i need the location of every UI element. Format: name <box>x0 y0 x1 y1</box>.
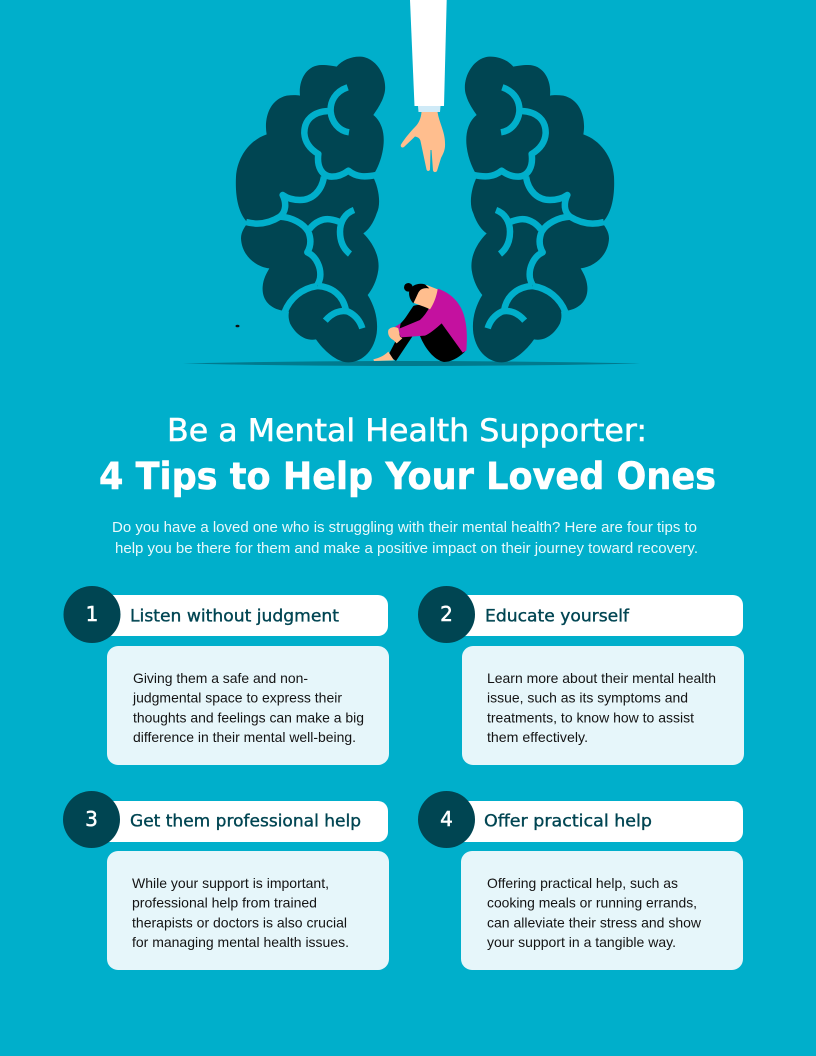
number badge 3 <box>63 791 120 848</box>
icon: right brain hemisphere <box>465 57 614 362</box>
panel: tip 1: judgmental space to express their <box>132 690 342 706</box>
intro text: Do you have a loved one who is struggling with their mental health? Here are four tips to <box>112 520 697 536</box>
header bar <box>95 801 388 842</box>
tip heading: Offer practical help <box>484 812 652 831</box>
panel: tip 4: 4 <box>440 807 453 831</box>
intro text: help you be there for them and make a positive impact on their journey toward recovery. <box>115 541 698 557</box>
number badge 4 <box>418 791 475 848</box>
text box <box>462 646 744 765</box>
header bar <box>450 595 743 636</box>
panel: tip 2: them effectively. <box>487 729 588 745</box>
text box <box>107 646 389 765</box>
panel: tip 3: therapists or doctors is also crucial <box>132 914 347 930</box>
icon: seated person hugging knees <box>373 283 467 362</box>
heading line 1: Be a Mental Health Supporter: <box>167 413 647 449</box>
icon: left brain hemisphere <box>236 57 385 362</box>
panel: tip 2: Learn more about their mental health <box>487 670 716 686</box>
header bar <box>95 595 388 636</box>
tip heading: Listen without judgment <box>130 606 340 626</box>
tip heading: Get them professional help <box>130 812 361 831</box>
panel: tip 4 <box>418 791 743 970</box>
panel: tip 4: your support in a tangible way. <box>487 934 676 950</box>
panel: tip 2: 2 <box>440 602 453 626</box>
panel: tip 3: professional help from trained <box>132 894 317 910</box>
ground shadow <box>183 361 640 366</box>
panel: tip 1: Giving them a safe and non- <box>133 670 308 686</box>
panel: tip 3: for managing mental health issues. <box>132 934 349 950</box>
panel: tip 2: issue, such as its symptoms and <box>487 690 688 706</box>
panel: tip 1: difference in their mental well-being. <box>133 729 356 745</box>
panel: tip 4: Offering practical help, such as <box>487 875 678 891</box>
heading line 2: 4 Tips to Help Your Loved Ones <box>99 455 716 498</box>
text box <box>461 851 743 970</box>
panel: tip 1: 1 <box>86 602 98 626</box>
illustration: brain, helping hand and seated person <box>183 0 640 366</box>
tip heading: Educate yourself <box>485 606 630 626</box>
icon: reaching hand in white sleeve <box>401 0 447 172</box>
header bar <box>450 801 743 842</box>
panel: tip 3: 3 <box>85 807 98 831</box>
panel: tip 1: thoughts and feelings can make a big <box>133 710 364 726</box>
panel: tip 4: can alleviate their stress and show <box>487 914 702 930</box>
panel: tip 4: cooking meals or running errands, <box>487 894 697 910</box>
panel: tip 3 <box>63 791 389 970</box>
intro text <box>112 520 698 557</box>
panel: tip 2: treatments, to know how to assist <box>487 710 694 726</box>
number badge 1 <box>64 586 120 643</box>
heading: title <box>99 413 716 498</box>
panel: tip 2 <box>418 586 744 765</box>
panel: tip 3: While your support is important, <box>132 875 329 891</box>
number badge 2 <box>418 586 475 643</box>
panel: tip 1 <box>64 586 389 765</box>
small dot <box>236 325 240 327</box>
text box <box>107 851 389 970</box>
